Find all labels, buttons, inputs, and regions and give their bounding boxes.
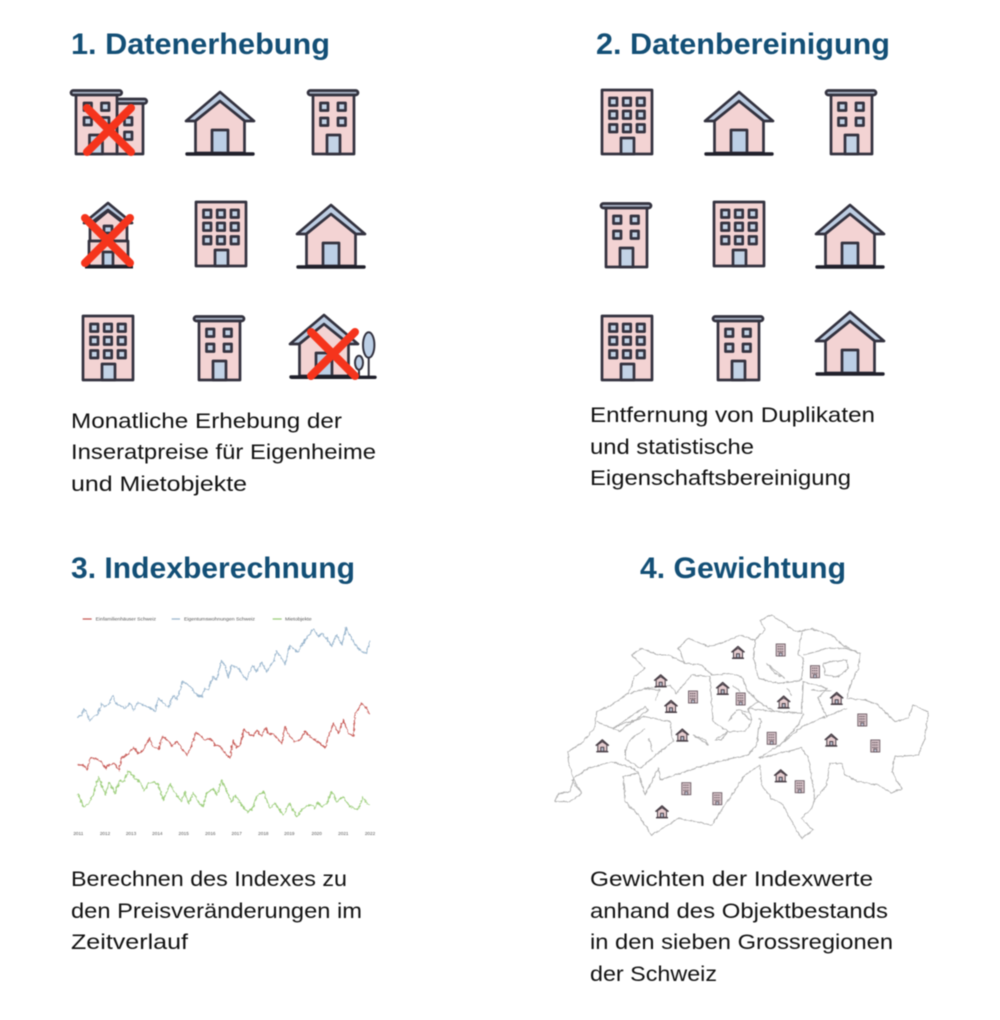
icon: mid-rise building <box>826 90 876 154</box>
chart x-axis years: 2021 <box>338 831 349 836</box>
text: step 4 description: in den sieben Grossregionen <box>590 930 893 954</box>
text: step 2 description: Eigenschaftsbereinigung <box>590 466 851 490</box>
map: Switzerland regions <box>555 615 928 838</box>
icon: tall building <box>714 202 764 266</box>
chart x-axis years: 2015 <box>178 831 189 836</box>
chart legend <box>83 617 312 622</box>
text: step 4 description: anhand des Objektbestands <box>590 899 888 923</box>
line: Einfamilienhäuser <box>78 703 369 771</box>
text: step 2 description: Entfernung von Duplikaten <box>590 403 875 427</box>
text: step 3 description: Berechnen des Indexes zu <box>71 867 347 891</box>
line: Eigentumswohnungen <box>77 628 370 721</box>
chart legend: Einfamilienhäuser Schweiz <box>96 617 157 622</box>
panel: 4. Gewichtung <box>555 552 928 986</box>
map icons: houses and buildings per region <box>596 644 880 818</box>
text: step 3 description: den Preisveränderungen im <box>71 899 362 923</box>
chart legend: Eigentumswohnungen Schweiz <box>184 617 256 622</box>
text: step 1 description <box>71 409 376 496</box>
heading: 1. Datenerhebung: 1. Datenerhebung <box>71 28 330 61</box>
text: step 1 description: Inseratpreise für Eigenheime <box>71 440 376 464</box>
icon: house <box>705 92 773 154</box>
chart x-axis years: 2018 <box>258 831 269 836</box>
text: step 4 description <box>590 867 893 986</box>
text: step 1 description: Monatliche Erhebung der <box>71 409 342 433</box>
icon: house <box>816 312 884 374</box>
icon: mid-rise building <box>601 204 651 267</box>
text: step 2 description <box>590 403 875 490</box>
icon: house <box>297 205 365 267</box>
icon: crossed-out house with trees <box>290 315 375 377</box>
text: step 3 description: Zeitverlauf <box>71 930 188 954</box>
icon: mid-rise building <box>308 90 358 154</box>
chart legend: Mietobjekte <box>285 617 312 622</box>
chart x-axis years: 2013 <box>126 831 137 836</box>
chart x-axis years <box>73 831 376 836</box>
chart x-axis years: 2011 <box>73 831 84 836</box>
text: step 3 description <box>71 867 362 954</box>
panel: 1. Datenerhebung <box>71 28 376 496</box>
icon: house <box>186 92 254 154</box>
heading: 2. Datenbereinigung: 2. Datenbereinigung <box>596 28 890 61</box>
text: step 4 description: der Schweiz <box>590 962 717 986</box>
panel: 3. Indexberechnung <box>71 552 376 954</box>
text: step 1 description: und Mietobjekte <box>71 472 247 496</box>
icon: mid-rise building <box>194 316 244 380</box>
icon: mid-rise building <box>713 316 763 380</box>
chart x-axis years: 2020 <box>311 831 322 836</box>
icon: crossed-out building complex <box>71 90 147 154</box>
chart x-axis years: 2017 <box>231 831 242 836</box>
chart x-axis years: 2014 <box>152 831 163 836</box>
chart x-axis years: 2016 <box>205 831 216 836</box>
chart: price index lines 2011-2022 <box>73 617 376 836</box>
chart lines <box>77 628 370 817</box>
heading: 3. Indexberechnung: 3. Indexberechnung <box>71 552 355 585</box>
icon: house <box>816 205 884 267</box>
chart x-axis years: 2022 <box>365 831 376 836</box>
chart x-axis years: 2019 <box>284 831 295 836</box>
icon: tall building <box>602 316 652 380</box>
chart x-axis years: 2012 <box>100 831 111 836</box>
icon: crossed-out apartment house <box>84 203 133 267</box>
text: step 2 description: und statistische <box>590 435 754 459</box>
icon: tall building <box>196 202 246 266</box>
icon: tall building <box>602 90 652 154</box>
icon: tall building <box>83 316 133 380</box>
text: step 4 description: Gewichten der Indexwerte <box>590 867 873 891</box>
heading: 4. Gewichtung: 4. Gewichtung <box>640 552 846 585</box>
line: Mietobjekte <box>78 771 370 817</box>
panel: 2. Datenbereinigung <box>590 28 890 490</box>
